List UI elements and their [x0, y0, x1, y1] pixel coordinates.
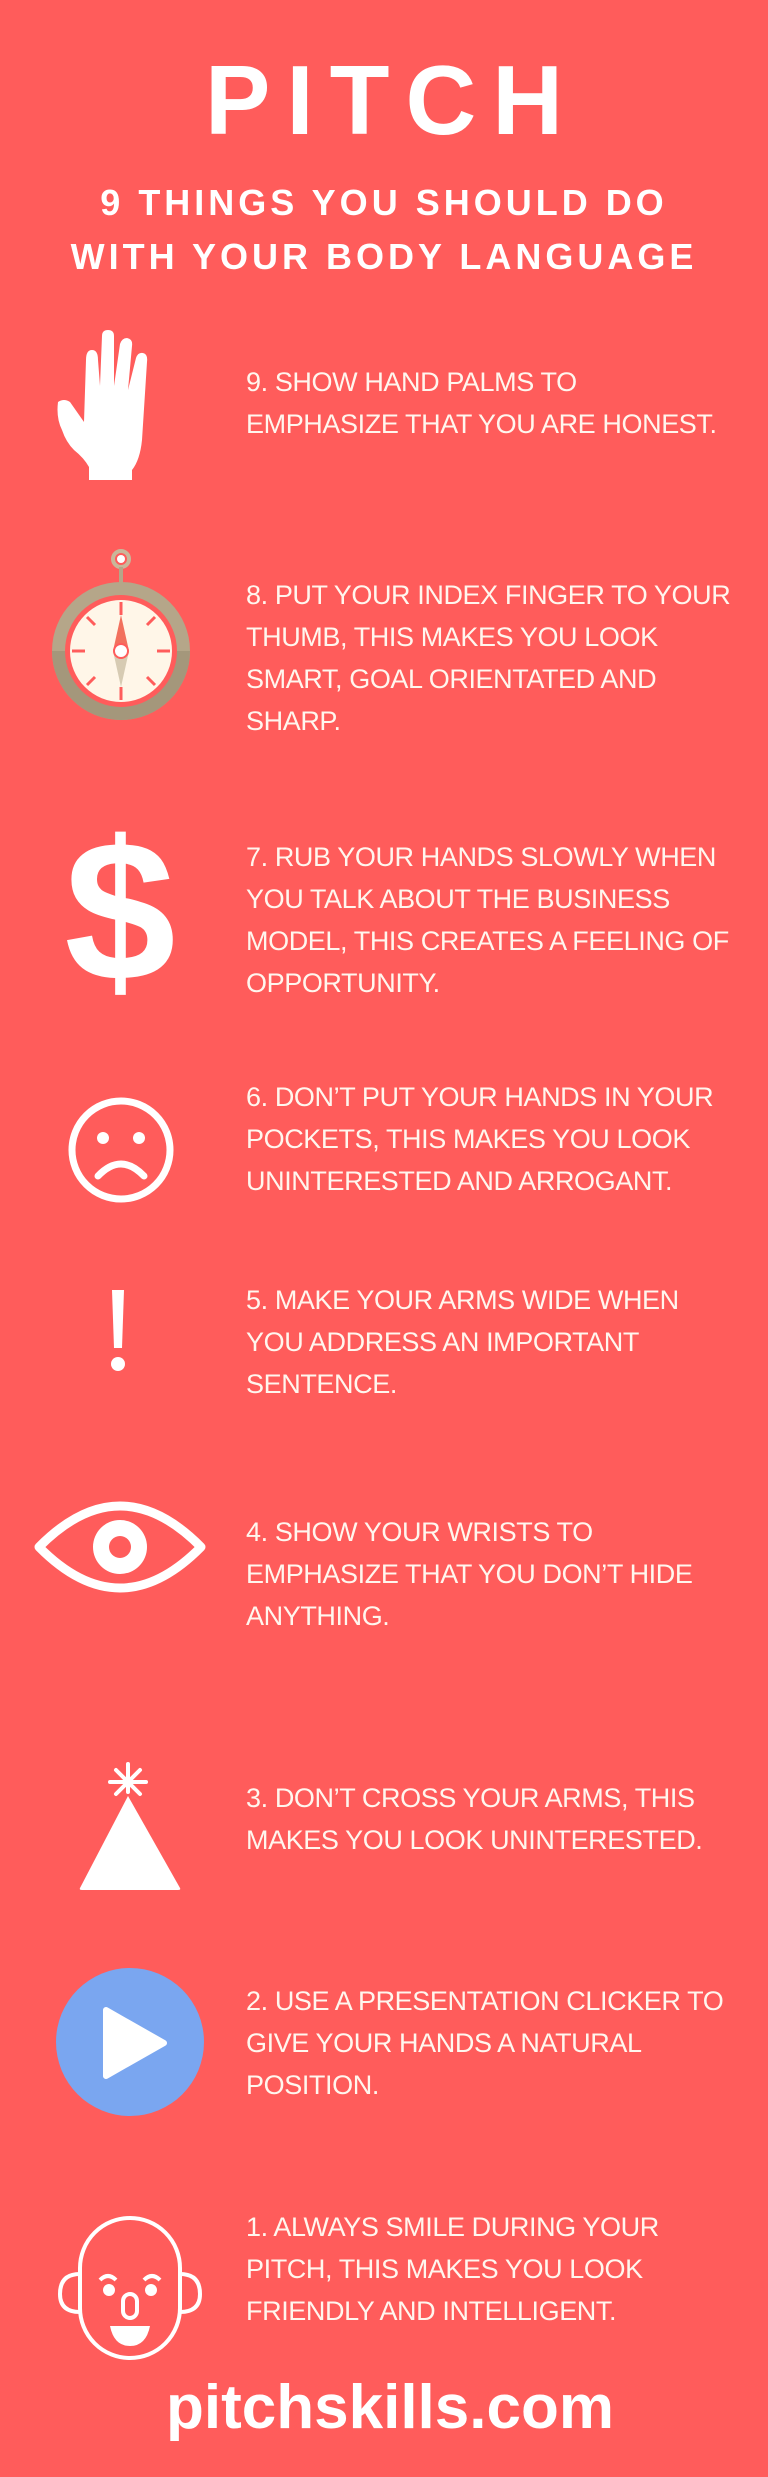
text: item 5: YOU ADDRESS AN IMPORTANT: [246, 1327, 639, 1357]
text: item 8: SHARP.: [246, 706, 341, 736]
text: item 9: 9. SHOW HAND PALMS TO: [246, 367, 577, 397]
text: item 3: [246, 1783, 702, 1855]
icon: smiling face: [58, 2216, 202, 2360]
icon: play button: [56, 1968, 204, 2116]
text: item 5: SENTENCE.: [246, 1369, 397, 1399]
text: item 5: [246, 1285, 679, 1399]
text: item 6: [246, 1082, 713, 1196]
text: item 2: POSITION.: [246, 2070, 379, 2100]
text: item 4: ANYTHING.: [246, 1601, 389, 1631]
text: item 8: SMART, GOAL ORIENTATED AND: [246, 664, 656, 694]
icon: hand: [58, 330, 148, 480]
text: item 8: 8. PUT YOUR INDEX FINGER TO YOUR: [246, 580, 730, 610]
icon: eye: [34, 1502, 206, 1592]
footer: website: pitchskills.com: [166, 2373, 614, 2442]
text: item 7: 7. RUB YOUR HANDS SLOWLY WHEN: [246, 842, 716, 872]
text: item 8: THUMB, THIS MAKES YOU LOOK: [246, 622, 658, 652]
text: item 9: [246, 367, 717, 439]
text: item 6: POCKETS, THIS MAKES YOU LOOK: [246, 1124, 690, 1154]
icon: sad face: [68, 1098, 174, 1202]
text: item 4: [246, 1517, 692, 1631]
text: item 5: 5. MAKE YOUR ARMS WIDE WHEN: [246, 1285, 679, 1315]
text: item 7: [246, 842, 729, 998]
text: item 4: 4. SHOW YOUR WRISTS TO: [246, 1517, 593, 1547]
text: item 7: YOU TALK ABOUT THE BUSINESS: [246, 884, 670, 914]
text: item 2: [246, 1986, 723, 2100]
subtitle: [70, 182, 697, 277]
text: item 3: 3. DON’T CROSS YOUR ARMS, THIS: [246, 1783, 695, 1813]
text: item 6: 6. DON’T PUT YOUR HANDS IN YOUR: [246, 1082, 713, 1112]
text: item 9: EMPHASIZE THAT YOU ARE HONEST.: [246, 409, 717, 439]
text: item 6: UNINTERESTED AND ARROGANT.: [246, 1166, 672, 1196]
text: item 1: 1. ALWAYS SMILE DURING YOUR: [246, 2212, 659, 2242]
text: item 7: OPPORTUNITY.: [246, 968, 440, 998]
text: item 7: MODEL, THIS CREATES A FEELING OF: [246, 926, 729, 956]
icon: exclamation: [111, 1290, 125, 1371]
title: PITCH: [205, 45, 579, 155]
icon: compass: [52, 549, 190, 720]
text: item 4: EMPHASIZE THAT YOU DON’T HIDE: [246, 1559, 692, 1589]
icon: dollar: $: [64, 800, 176, 1023]
text: item 1: [246, 2212, 659, 2326]
text: item 2: 2. USE A PRESENTATION CLICKER TO: [246, 1986, 723, 2016]
subtitle: 9 THINGS YOU SHOULD DO: [100, 182, 668, 223]
icon: party hat: [80, 1762, 180, 1890]
text: item 3: MAKES YOU LOOK UNINTERESTED.: [246, 1825, 702, 1855]
subtitle: WITH YOUR BODY LANGUAGE: [71, 236, 697, 277]
text: item 1: FRIENDLY AND INTELLIGENT.: [246, 2296, 616, 2326]
text: item 2: GIVE YOUR HANDS A NATURAL: [246, 2028, 642, 2058]
text: item 8: [246, 580, 730, 736]
text: item 1: PITCH, THIS MAKES YOU LOOK: [246, 2254, 643, 2284]
